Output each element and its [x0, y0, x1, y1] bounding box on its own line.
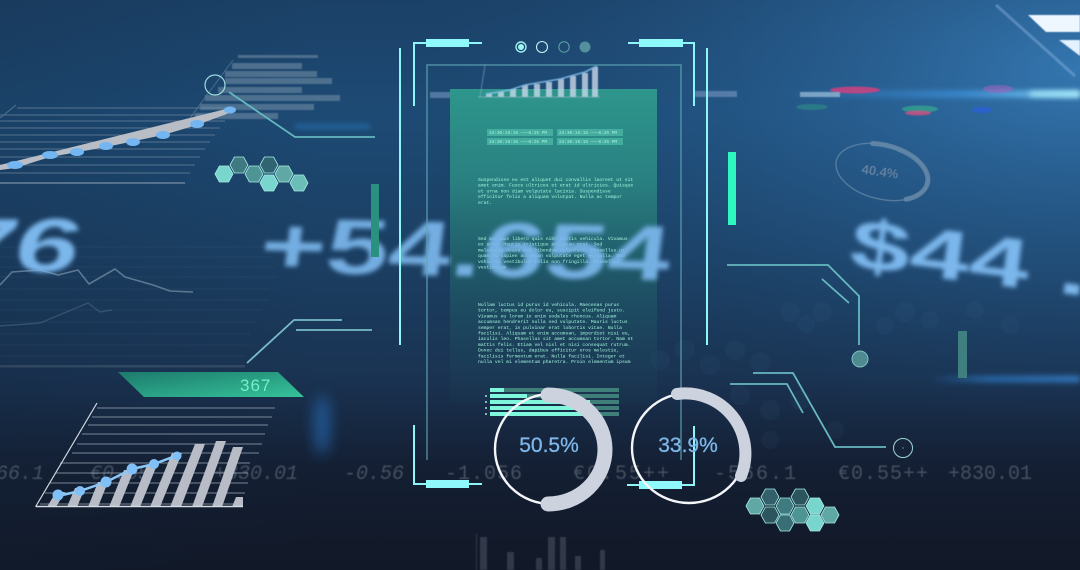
paragraph two: vehicula vestibulum felis non fringilla. Phasellus: [478, 259, 619, 265]
bottom-right bracket: [627, 426, 694, 489]
paragraph two: vestibulum: [478, 264, 506, 270]
big blurred value: centre: +54.654: [255, 201, 677, 297]
paragraph one: erat.: [478, 200, 492, 206]
right rail: [706, 48, 708, 345]
paragraph three: Nullam luctus id purus id vehicula. Maecenas purus: [478, 302, 619, 308]
ghost chart: bottom centre: [476, 534, 605, 570]
paragraph two: ex arcu. Mauris tristique accumsan erat. Sed: [478, 242, 602, 248]
decorative top-right bars: [996, 5, 1080, 76]
paragraph one: amet enim. Fusce ultrices et erat id ultricies. Quisque: [478, 183, 633, 189]
paragraph two: Sed maximus libero quis nibh mattis vehicula. Vivamus: [478, 236, 628, 242]
hexagon cluster: bottom right: [746, 489, 839, 531]
donut gauge: 50.5%: [495, 394, 607, 504]
value tag: 367: 367: [240, 376, 271, 395]
ticker: bottom currency values: -566.1: [714, 463, 798, 486]
connector: left lower: [247, 320, 372, 363]
left rail: [399, 48, 401, 345]
paragraph three: mattis felis. Etiam vel nisl et nisi consequat rutrum.: [478, 342, 630, 348]
chart: horizontal bars, top left: [190, 55, 340, 119]
donut gauge: 50.5%: 50.5%: [519, 434, 579, 457]
frame brackets: [400, 39, 694, 489]
bottom-left bracket: [414, 425, 482, 488]
ghost ring: 40.4%: 40.4%: [861, 162, 900, 182]
ticker: bottom currency values: €0.55++: [838, 463, 929, 486]
top-right bracket: [628, 39, 694, 106]
connector: right lower: [730, 373, 912, 458]
hexagon cluster: top left: [215, 157, 308, 191]
paragraph two: [478, 236, 628, 270]
time range chips: 24:30:19:15 ———6:25 PM: [559, 131, 617, 136]
time range chips: 24:30:19:15 ———6:25 PM: [559, 140, 617, 145]
accent bar: right bright green: [728, 152, 736, 225]
time range chips: 24:30:19:15 ———6:25 PM: [489, 131, 547, 136]
time range chips: [487, 129, 623, 145]
paragraph one: et urna non diam vulputate lacinia. Suspendisse: [478, 188, 611, 194]
paragraph three: iaculis leo. Phasellus sit amet accumsan tortor. Nam et: [478, 336, 633, 342]
paragraph one: efficitur felis a aliquam volutpat. Nulla ac tempor: [478, 194, 622, 200]
inner frame: [427, 65, 681, 460]
big blurred value: right: $44 .: [846, 204, 1080, 311]
paragraph three: facilisis fermentum erat. Nulla facilisi. Integer et: [478, 353, 625, 359]
paragraph three: tortor, tempus eu dolor eu, suscipit eleifend justo.: [478, 308, 625, 314]
paragraph three: facilisi. Aliquam et enim accumsan, imperdiet nisi eu,: [478, 330, 630, 336]
donut gauge: 33.9%: [632, 393, 746, 503]
donut gauge: 33.9%: 33.9%: [658, 434, 718, 457]
ticker: bottom currency values: +830.01: [214, 463, 298, 486]
connector: top-left callout: [205, 75, 375, 137]
ticker: bottom currency values: €0.55++: [573, 463, 671, 486]
paragraph two: quam eu sapien accumsan vulputate eget eu nulla. Sed: [478, 253, 625, 259]
top-left bracket: [414, 39, 482, 106]
ticker: bottom currency values: €0.55: [90, 463, 150, 486]
chart: faint line chart, left: [0, 247, 278, 368]
accent bar: left green: [371, 184, 379, 257]
paragraph two: malesuada neque sed bibendum vulputate. Phasellus ut: [478, 247, 625, 253]
paragraph three: Vivamus eu lorem in enim sodales rhoncus. Aliquam: [478, 313, 616, 319]
ticker: bottom currency values: -0.56: [344, 463, 404, 486]
paragraph three: semper erat, in pulvinar erat lobortis vitae. Nulla: [478, 325, 622, 331]
chart: rising line with grid, top left: [0, 105, 236, 183]
ghost ring: 40.4%: [830, 134, 934, 210]
value tag: 367: [118, 372, 304, 397]
chart: bar and line, bottom left: [36, 403, 275, 507]
time range chips: 24:30:19:15 ———6:25 PM: [489, 140, 547, 145]
ticker: bottom currency values: +830.01: [948, 463, 1032, 486]
document panel: [450, 65, 657, 416]
accent bar: right faint: [958, 331, 967, 378]
pagination dots: [516, 42, 590, 52]
ticker: bottom currency values: -1.056: [445, 463, 523, 486]
paragraph one: [478, 177, 633, 206]
paragraph one: Suspendisse eu est aliquet dui convallis laoreet ut sit: [478, 177, 633, 183]
ticker: bottom currency values: [0, 463, 1032, 486]
mini progress bars: [485, 388, 619, 416]
connector: right upper: [727, 265, 868, 367]
paragraph three: Donec dui tellus, dapibus efficitur eros molestie,: [478, 348, 619, 354]
paragraph three: [478, 302, 633, 365]
paragraph three: accumsan hendrerit nulla sed vulputate. Mauris luctus: [478, 319, 628, 325]
small bar chart above panel: [478, 65, 600, 97]
lens flare: right side streaks: [295, 85, 1080, 455]
paragraph three: nulla vel mi elementum pharetra. Proin elementum ipsum: [478, 359, 631, 365]
